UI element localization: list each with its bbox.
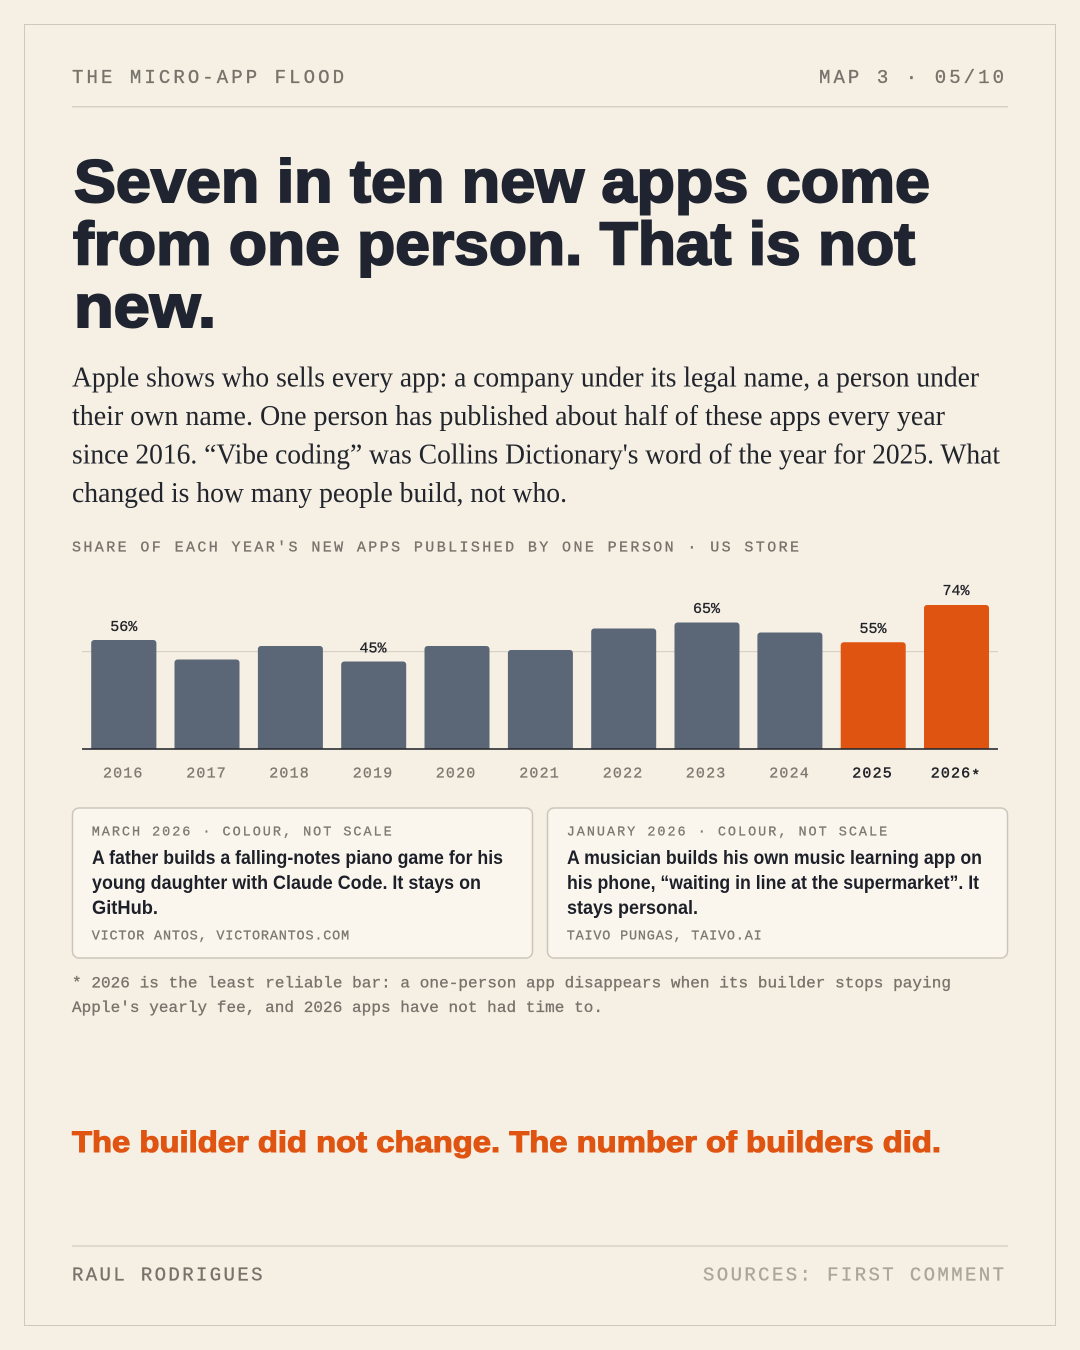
intro paragraph: Apple shows who sells every app: a company under its legal name, a person under xyxy=(72,363,979,394)
bar chart xyxy=(82,583,998,785)
year labels: * xyxy=(971,768,980,785)
title: from one person. That is not xyxy=(73,210,915,278)
year labels: 2021 xyxy=(519,766,559,782)
year labels: 2016 xyxy=(103,766,142,782)
footer: author: RAUL RODRIGUES xyxy=(72,1264,262,1286)
bars: 2016 to 2024 xyxy=(91,622,822,749)
year labels: 2024 xyxy=(769,766,809,782)
card: piano game: GitHub. xyxy=(92,897,158,919)
chart heading: SHARE OF EACH YEAR'S NEW APPS PUBLISHED BY ONE PERSON · US STORE xyxy=(72,540,799,556)
value labels: 45% xyxy=(359,640,387,657)
footnote xyxy=(72,974,951,1017)
year labels: 2025 xyxy=(852,766,892,782)
card: piano game: A father builds a falling-notes piano game for his xyxy=(92,847,503,869)
footer: sources: SOURCES: FIRST COMMENT xyxy=(703,1264,1004,1286)
year labels: 2026 xyxy=(931,766,970,782)
card: piano game: VICTOR ANTOS, VICTORANTOS.COM xyxy=(92,929,349,944)
takeaway line: The builder did not change. The number of builders did. xyxy=(72,1126,941,1159)
year labels xyxy=(103,766,980,785)
header: series name: THE MICRO-APP FLOOD xyxy=(72,67,344,89)
card: piano game: young daughter with Claude Code. It stays on xyxy=(92,872,481,894)
year labels: 2020 xyxy=(436,766,475,782)
card: piano game: MARCH 2026 · COLOUR, NOT SCALE xyxy=(92,826,392,841)
footnote: Apple's yearly fee, and 2026 apps have not had time to. xyxy=(72,999,603,1017)
intro paragraph xyxy=(72,363,1000,509)
card: music learning app xyxy=(548,808,1008,958)
intro paragraph: changed is how many people build, not who. xyxy=(72,478,567,509)
card: music learning app: TAIVO PUNGAS, TAIVO.AI xyxy=(567,929,762,944)
title: Seven in ten new apps come xyxy=(74,148,930,215)
title xyxy=(73,148,930,340)
card: music learning app: his phone, “waiting in line at the supermarket”. It xyxy=(567,872,979,894)
bars: 2025 and 2026 highlighted xyxy=(841,605,989,749)
card: music learning app: A musician builds his own music learning app on xyxy=(567,847,982,869)
intro paragraph: their own name. One person has published about half of these apps every year xyxy=(72,401,945,432)
value labels: 65% xyxy=(693,601,721,618)
title: new. xyxy=(74,273,216,340)
card: piano game xyxy=(72,808,532,958)
header: map number and page: MAP 3 · 05/10 xyxy=(819,67,1004,89)
value labels: 55% xyxy=(859,621,887,638)
year labels: 2018 xyxy=(269,766,309,782)
year labels: 2023 xyxy=(686,766,725,782)
footnote: * 2026 is the least reliable bar: a one-person app disappears when its builder stops paying xyxy=(72,974,951,992)
value labels: 56% xyxy=(110,619,138,636)
year labels: 2017 xyxy=(186,766,226,782)
value labels: 74% xyxy=(942,583,970,600)
year labels: 2022 xyxy=(603,766,642,782)
intro paragraph: since 2016. “Vibe coding” was Collins Dictionary's word of the year for 2025. What xyxy=(72,439,1000,470)
card: music learning app: stays personal. xyxy=(567,897,698,919)
year labels: 2019 xyxy=(353,766,392,782)
value labels xyxy=(110,583,970,657)
card: music learning app: JANUARY 2026 · COLOUR, NOT SCALE xyxy=(567,826,887,841)
